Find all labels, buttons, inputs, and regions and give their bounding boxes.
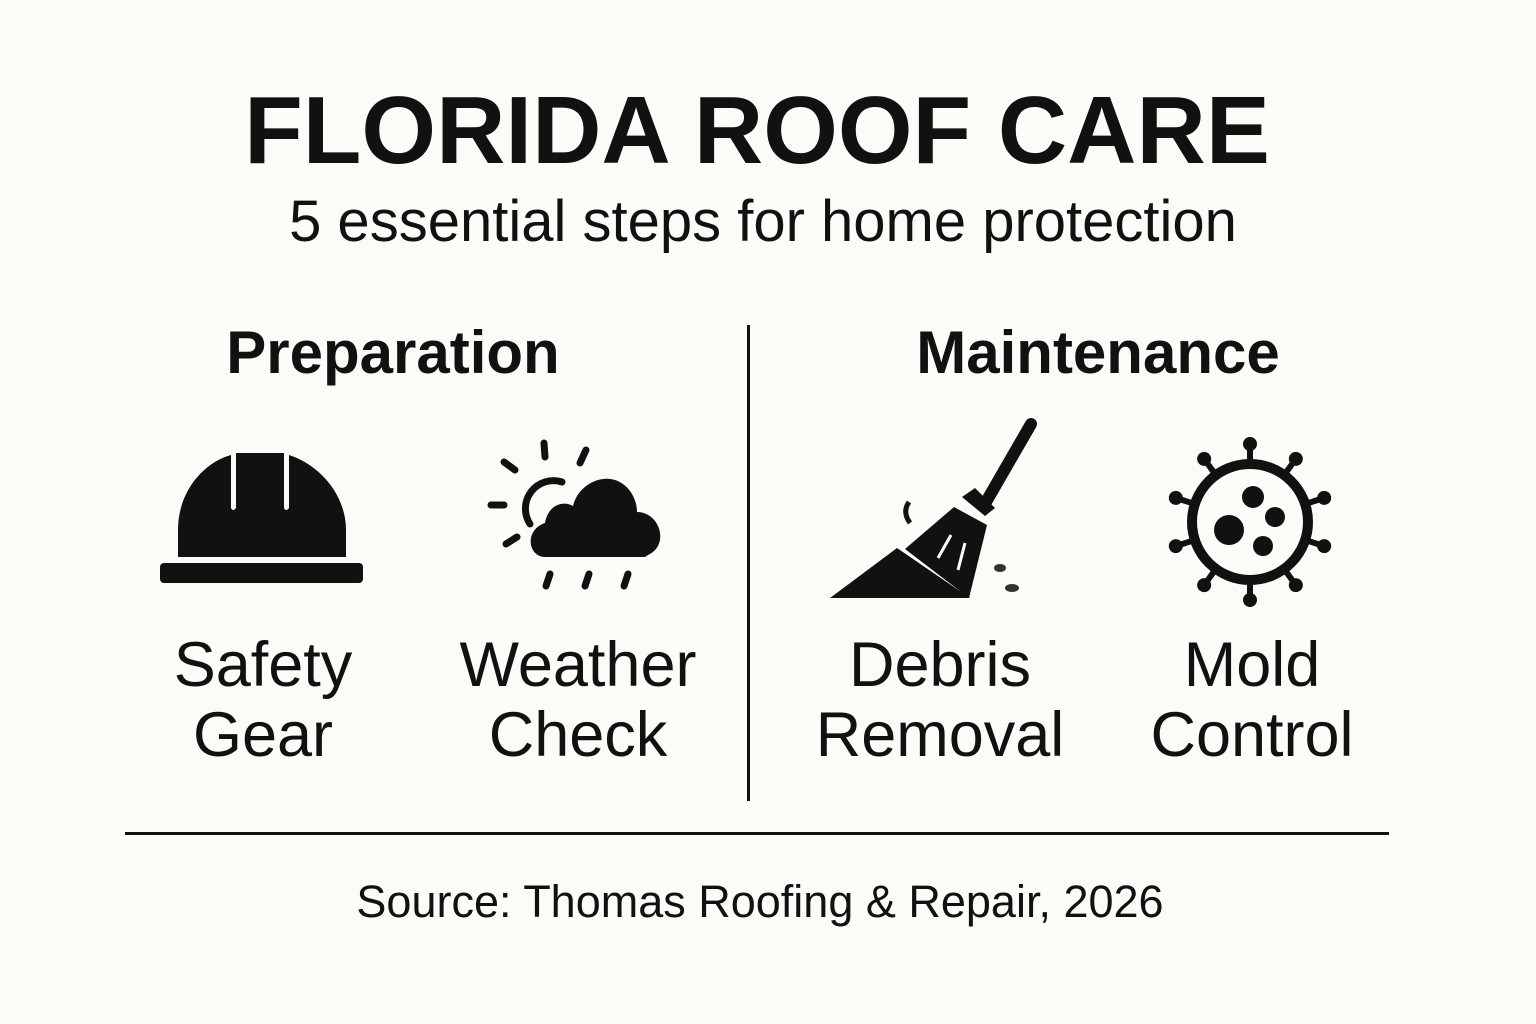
label: Safety Gear: Gear [193,700,333,770]
label: Safety Gear: Safety [174,630,352,700]
icon: mold virus [1168,437,1332,607]
horizontal divider [125,832,1389,835]
label: Mold Control [1150,630,1354,770]
icon: hard hat [160,453,363,583]
title: FLORIDA ROOF CARE [244,77,1270,184]
source: Source: Thomas Roofing & Repair, 2026 [356,876,1164,927]
icon: weather sun cloud rain [488,440,660,590]
heading: Preparation: Preparation [226,319,560,386]
icon: broom [830,418,1037,598]
label: Weather Check [460,630,696,770]
label: Weather Check: Weather [460,630,696,700]
subtitle: 5 essential steps for home protection [289,189,1237,254]
vertical divider [747,325,750,801]
heading: Maintenance: Maintenance [916,319,1280,386]
label: Debris Removal: Debris [849,630,1031,700]
label: Debris Removal: Removal [816,700,1064,770]
label: Safety Gear [174,630,352,770]
label: Mold Control: Mold [1184,630,1320,700]
label: Debris Removal [816,630,1064,770]
label: Mold Control: Control [1150,700,1354,770]
label: Weather Check: Check [489,700,667,770]
